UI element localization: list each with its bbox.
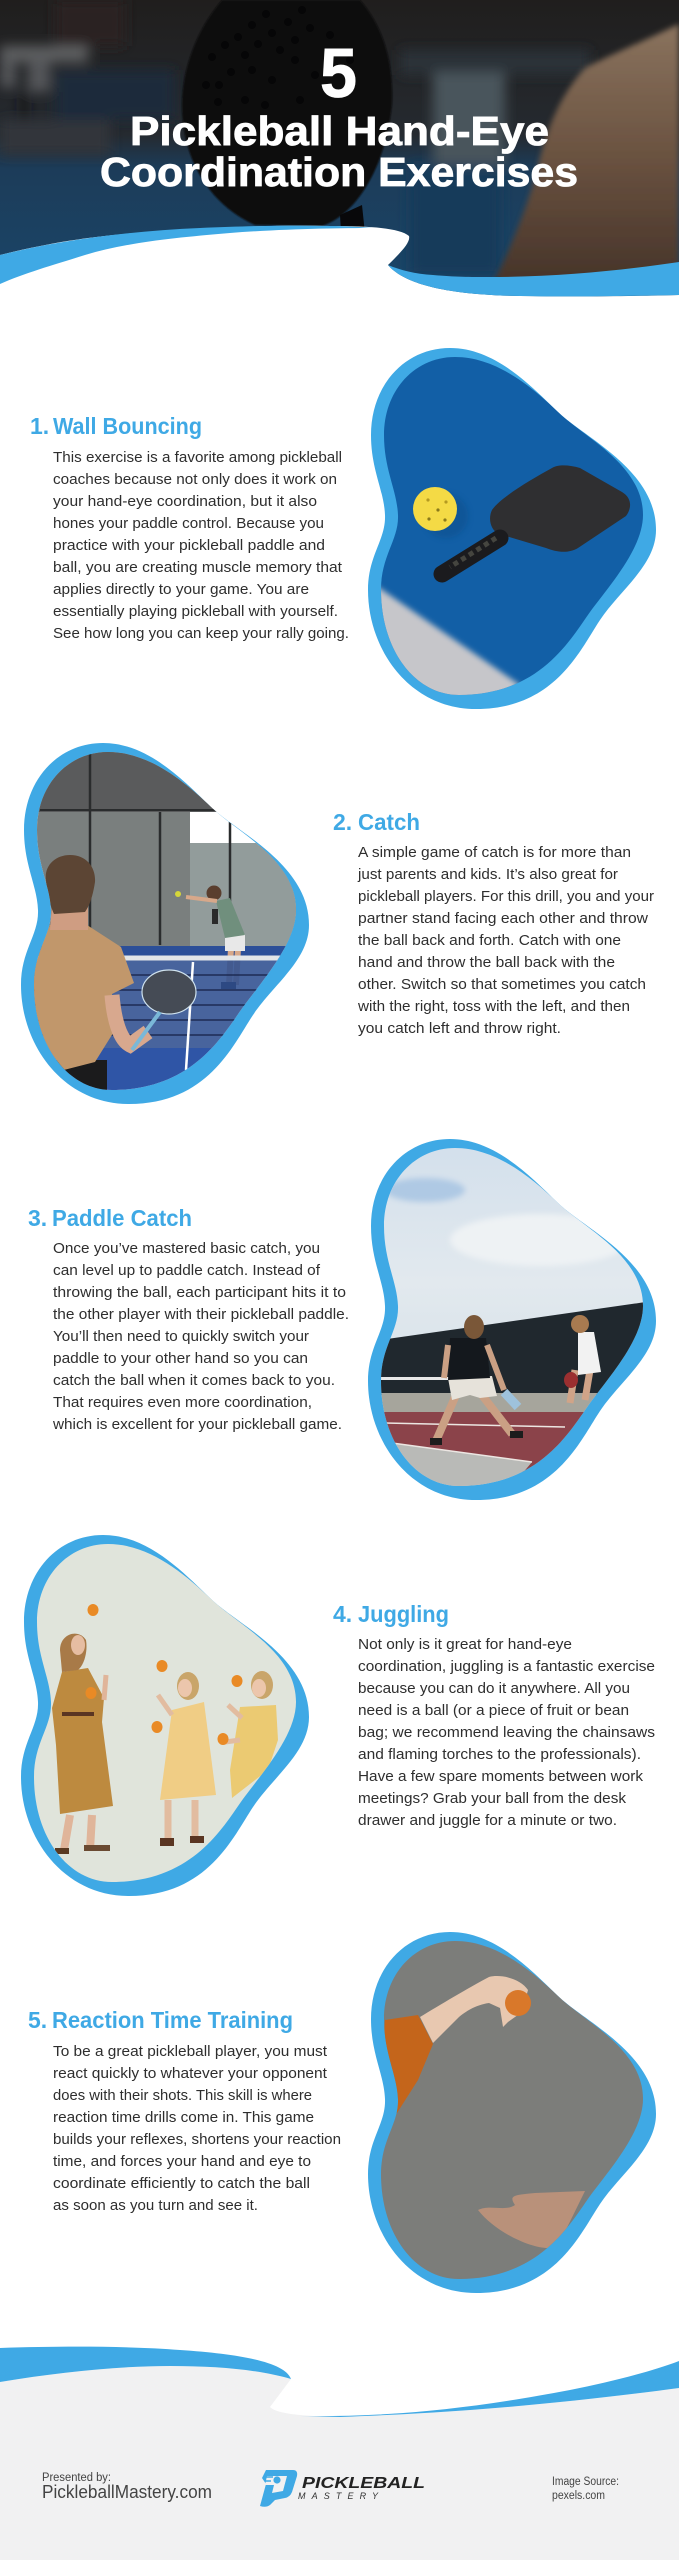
image source: pexels.com: [552, 2490, 605, 2502]
paddle silhouette: [182, 0, 393, 227]
tennis net: [20, 958, 280, 1070]
section 5: reaction time text: Reaction Time Training: [52, 2007, 293, 2033]
presented by: Presented by:: [42, 2472, 111, 2484]
presented by: [42, 2472, 212, 2502]
section 3: photo blob with outdoor court: [365, 1135, 665, 1505]
far player: [564, 1315, 601, 1403]
section 4: juggling text: because you can do it anywhere. All you: [358, 1681, 630, 1697]
section 5: photo blob with hands and ball: [365, 1925, 660, 2295]
juggling balls: [86, 1604, 242, 1745]
section 3: paddle catch text: paddle to your other hand so you can: [53, 1351, 308, 1367]
title: 5: [320, 34, 357, 112]
section 3: paddle catch text: can level up to paddle catch. Instead of: [53, 1263, 321, 1279]
section 1: wall bouncing text: 1.: [30, 413, 49, 439]
header photo: [0, 0, 679, 300]
section 1: wall bouncing text: coaches because not only does it work on: [53, 472, 337, 488]
section 1: wall bouncing text: ball, you are creating muscle memory that: [53, 560, 342, 576]
section 1: wall bouncing text: [30, 413, 349, 642]
section 4: juggling text: coordination, juggling is a fantastic exercise: [358, 1659, 655, 1675]
section 4: juggling text: and flaming torches to the professionals).: [358, 1747, 641, 1763]
footer background: [0, 2366, 679, 2560]
upper hand with ball: [380, 1976, 531, 2113]
section 1: wall bouncing text: This exercise is a favorite among pickleball: [53, 450, 342, 466]
section 3: paddle catch text: the other player with their pickleball paddle.: [53, 1307, 349, 1323]
section 2: catch text: with the right, toss with the left, and then: [357, 999, 630, 1015]
section 3: paddle catch text: 3.: [28, 1205, 47, 1231]
section 2: catch text: just parents and kids. It’s also great for: [357, 867, 618, 883]
presented by: PickleballMastery.com: [42, 2482, 212, 2502]
section 2: catch text: A simple game of catch is for more than: [358, 845, 631, 861]
section 3: paddle catch text: which is excellent for your pickleball game.: [52, 1417, 342, 1433]
title: [100, 34, 578, 195]
section 1: wall bouncing text: hones your paddle control. Because you: [53, 516, 324, 532]
section 2: catch text: 2.: [333, 809, 352, 835]
second girl: [225, 1671, 278, 1798]
footer wave: [0, 2347, 679, 2417]
image source: [552, 2476, 619, 2502]
section 1: wall bouncing text: your hand-eye coordination, but it also: [53, 494, 317, 510]
section 5: reaction time text: 5.: [28, 2007, 47, 2033]
section 4: juggling text: bag; we recommend leaving the chainsaws: [358, 1725, 655, 1741]
section 1: wall bouncing text: practice with your pickleball paddle and: [53, 538, 325, 554]
logo: [260, 2470, 425, 2507]
section 2: catch text: you catch left and throw right.: [358, 1021, 561, 1037]
section 1: wall bouncing text: See how long you can keep your rally going.: [53, 626, 349, 642]
section 1: wall bouncing text: applies directly to your game. You are: [53, 582, 309, 598]
section 1: wall bouncing text: essentially playing pickleball with yourself.: [53, 604, 338, 620]
title: Coordination Exercises: [100, 149, 578, 195]
section 3: paddle catch text: Paddle Catch: [52, 1205, 192, 1231]
section 4: juggling text: Have a few spare moments between work: [358, 1769, 644, 1785]
logo wordmark: MASTERY: [298, 2491, 379, 2501]
logo wordmark: [298, 2475, 425, 2501]
section 2: catch text: the ball back and forth. Catch with one: [358, 933, 621, 949]
section 5: reaction time text: does with their shots. This skill is where: [53, 2088, 312, 2104]
section 5: reaction time text: react quickly to whatever your opponent: [53, 2066, 327, 2082]
section 4: juggling text: 4.: [333, 1601, 352, 1627]
black paddle: [442, 465, 630, 574]
section 5: reaction time text: [28, 2007, 341, 2214]
section 4: juggling text: [333, 1601, 655, 1829]
section 3: paddle catch text: Once you’ve mastered basic catch, you: [53, 1241, 320, 1257]
section 5: reaction time text: as soon as you turn and see it.: [53, 2198, 258, 2214]
section 2: catch text: Catch: [358, 809, 420, 835]
lower hand: [478, 2191, 585, 2252]
section 4: juggling text: meetings? Grab your ball from the desk: [358, 1791, 627, 1807]
section 2: catch text: [333, 809, 654, 1037]
title: Pickleball Hand-Eye: [130, 108, 549, 154]
section 2: catch text: partner stand facing each other and throw: [358, 911, 649, 927]
held paddle: [132, 970, 196, 1050]
section 2: catch text: hand and throw the ball back with the: [358, 955, 615, 971]
section 5: reaction time text: time, and forces your hand and eye to: [53, 2154, 311, 2170]
logo wordmark: PICKLEBALL: [302, 2475, 425, 2492]
near player: [30, 855, 196, 1110]
section 5: reaction time text: coordinate efficiently to catch the ball: [53, 2176, 310, 2192]
logo icon: [260, 2470, 297, 2507]
section 3: paddle catch text: throwing the ball, each participant hits it to: [53, 1285, 346, 1301]
section 3: paddle catch text: You’ll then need to quickly switch your: [53, 1329, 309, 1345]
yellow ball: [413, 487, 468, 538]
section 4: juggling text: drawer and juggle for a minute or two.: [358, 1813, 617, 1829]
near player: [430, 1315, 523, 1445]
blurred player: [490, 24, 679, 290]
section 2: photo blob with indoor court: [20, 740, 320, 1110]
section 4: juggling text: Not only is it great for hand-eye: [358, 1637, 572, 1653]
section 5: reaction time text: To be a great pickleball player, you must: [53, 2044, 327, 2060]
section 3: paddle catch text: [28, 1205, 349, 1433]
section 2: catch text: pickleball players. For this drill, you and your: [358, 889, 654, 905]
section 4: juggling text: Juggling: [358, 1601, 449, 1627]
image source: Image Source:: [552, 2476, 619, 2488]
section 1: wall bouncing text: Wall Bouncing: [53, 413, 202, 439]
first girl: [158, 1672, 216, 1846]
section 4: juggling text: need is a ball (or a piece of fruit or bean: [358, 1703, 629, 1719]
section 4: photo blob with jugglers: [20, 1530, 320, 1900]
section 1: photo blob with paddle and ball: [360, 340, 660, 720]
section 3: paddle catch text: catch the ball when it comes back to you.: [53, 1373, 335, 1389]
section 3: paddle catch text: That requires even more coordination,: [53, 1395, 312, 1411]
section 5: reaction time text: builds your reflexes, shortens your reaction: [53, 2132, 341, 2148]
section 2: catch text: other. Switch so that sometimes you catch: [358, 977, 646, 993]
far player: [175, 886, 245, 989]
top wave: [0, 226, 679, 320]
section 5: reaction time text: reaction time drills come in. This game: [53, 2110, 314, 2126]
woman: [52, 1634, 113, 1854]
